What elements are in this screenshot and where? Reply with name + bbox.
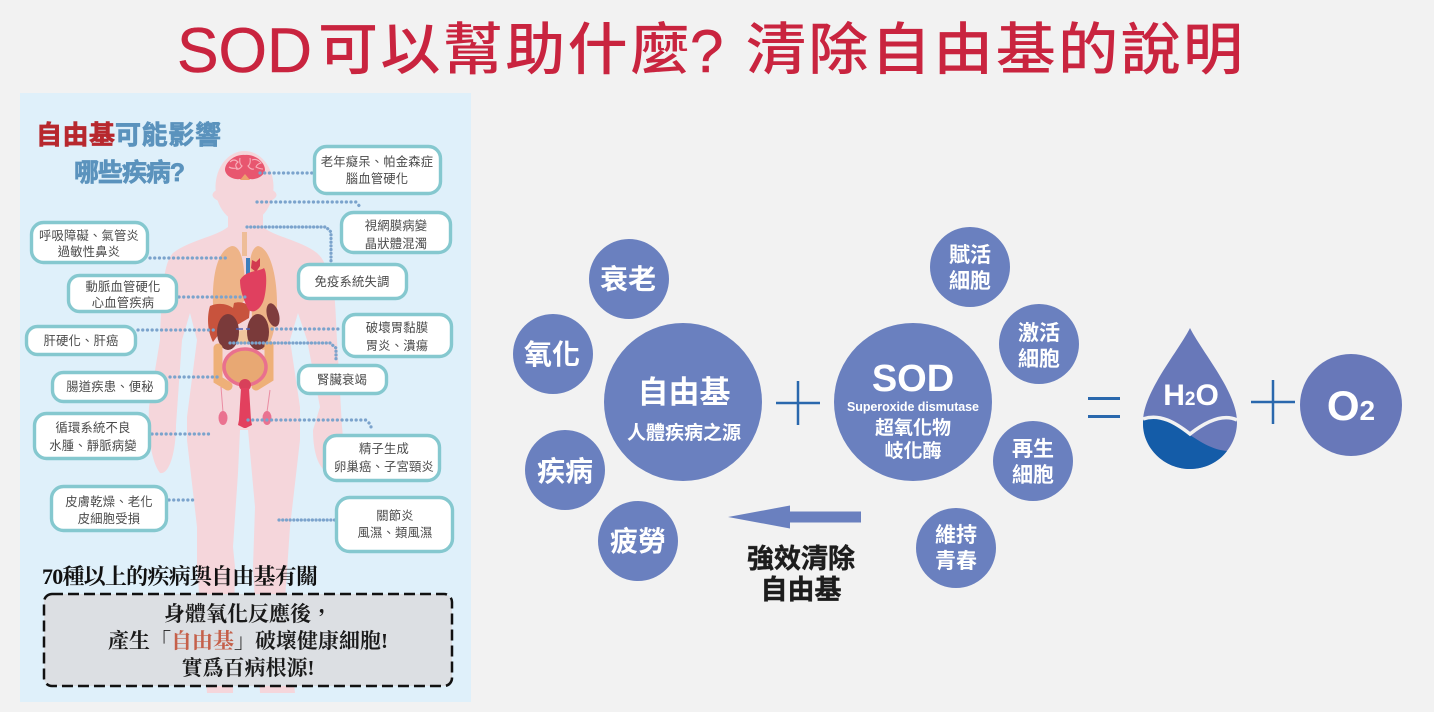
- callout: arteries: 心血管疾病: [92, 295, 154, 310]
- circle: SOD: Superoxide dismutase: [847, 400, 979, 414]
- dotted connector lines: [138, 173, 371, 520]
- panel heading: 可能影響: [115, 120, 221, 150]
- title: [177, 16, 1243, 86]
- callout: liver: 肝硬化、肝癌: [44, 333, 118, 348]
- circle: disease: [525, 430, 605, 510]
- circle: free radicals: 人體疾病之源: [627, 421, 741, 444]
- circle: activate cells: 激活: [1018, 322, 1060, 345]
- callout: respiratory: 呼吸障礙、氣管炎: [39, 228, 139, 243]
- callout: skin: 皮膚乾燥、老化: [65, 494, 153, 509]
- circle: SOD: SOD: [872, 358, 954, 400]
- diagram: free radical cluster: [513, 239, 762, 581]
- icon: brain: [225, 155, 265, 180]
- circle: free radicals: 自由基: [638, 375, 730, 410]
- equals sign: [1088, 398, 1120, 416]
- statement: 70 diseases: 70種以上的疾病與自由基有關: [42, 564, 318, 589]
- callout: dementia: 腦血管硬化: [346, 171, 408, 186]
- circle: oxidation: [513, 314, 593, 394]
- callout: immune: [298, 264, 406, 298]
- callout: stomach: 胃炎、潰瘍: [366, 338, 428, 353]
- circle: SOD: 岐化酶: [884, 440, 942, 462]
- bladder: [224, 349, 266, 385]
- icon: water drop H2O: H2O: [1163, 379, 1219, 412]
- circle: fatigue: [598, 501, 678, 581]
- circle: aging: [589, 239, 669, 319]
- arrow label: 強效清除: [747, 543, 855, 574]
- callout: intestine: 腸道疾患、便秘: [66, 379, 154, 394]
- callout: reproductive: 卵巢癌、子宮頸炎: [334, 459, 434, 474]
- circle: maintain youth: [916, 508, 996, 588]
- dashed summary box: 身體氧化反應後，: [164, 602, 332, 626]
- panel heading: [36, 120, 221, 187]
- callout: stomach: 破壞胃黏膜: [366, 320, 428, 335]
- circle: regenerate cells: [993, 421, 1073, 501]
- callout: respiratory: 過敏性鼻炎: [58, 244, 120, 259]
- circle: free radicals: [604, 323, 762, 481]
- callout: retina: 晶狀體混濁: [365, 236, 427, 251]
- diagram: SOD cluster: [834, 227, 1079, 588]
- arrow label: [747, 543, 855, 605]
- circle: activate cells: 細胞: [1018, 348, 1060, 371]
- panel heading: 自由基: [36, 120, 115, 150]
- circle: invigorate cells: 細胞: [949, 270, 991, 293]
- callout: intestine: [52, 372, 166, 402]
- circle: SOD: 超氧化物: [875, 417, 951, 439]
- dashed summary box: [44, 594, 452, 686]
- callout: circulation: [34, 414, 150, 458]
- callout: dementia: 老年癡呆、帕金森症: [321, 154, 433, 169]
- circle: aging: 衰老: [600, 264, 656, 295]
- callout: respiratory: [32, 222, 148, 262]
- callout: joints: 關節炎: [376, 508, 414, 523]
- reproductive organs: [239, 379, 251, 391]
- callout: liver: [26, 326, 136, 354]
- callout: joints: 風濕、類風濕: [358, 526, 432, 540]
- panel: diseases linked to free radicals: [20, 93, 471, 702]
- callout: stomach: [344, 314, 452, 356]
- icon: water drop H2O: [1143, 328, 1237, 469]
- circle: oxidation: 氧化: [524, 339, 580, 370]
- intestine: [218, 345, 269, 386]
- circle: disease: 疾病: [537, 456, 593, 487]
- arrow: SOD clears free radicals: [728, 506, 861, 528]
- circle: maintain youth: 維持: [935, 524, 977, 547]
- callout: joints: [336, 498, 452, 552]
- windpipe: [242, 232, 247, 256]
- circle: regenerate cells: 再生: [1012, 438, 1054, 461]
- circle: SOD: [834, 323, 992, 481]
- circle: maintain youth: 青春: [935, 550, 977, 573]
- panel heading: 哪些疾病?: [74, 159, 185, 187]
- callout: retina: [342, 212, 450, 252]
- organs illustration: [208, 232, 282, 428]
- panel background: [20, 93, 471, 702]
- circle: activate cells: [999, 304, 1079, 384]
- heart: [240, 258, 266, 311]
- title: 可以幫助什麼: [318, 19, 690, 82]
- dashed summary box: 實爲百病根源!: [182, 656, 314, 680]
- circle: invigorate cells: 賦活: [949, 244, 991, 267]
- callout: immune: 免疫系統失調: [315, 274, 389, 289]
- callout: arteries: [68, 276, 176, 312]
- plus sign: [1251, 380, 1295, 424]
- callout: skin: 皮細胞受損: [78, 511, 140, 526]
- callout: skin: [52, 486, 166, 530]
- dashed summary box: 產生「自由基」破壞健康細胞!: [108, 629, 388, 653]
- callout: kidney: 腎臟衰竭: [317, 372, 367, 387]
- callout: retina: 視網膜病變: [365, 218, 427, 233]
- circle: oxygen: O2: [1327, 382, 1375, 429]
- callout: dementia: [314, 146, 440, 194]
- title: ?: [690, 18, 723, 85]
- title: SOD: [177, 16, 312, 86]
- circle: oxygen: [1300, 354, 1402, 456]
- callout: kidney: [298, 366, 386, 394]
- arrow label: 自由基: [760, 575, 842, 605]
- circle: fatigue: 疲勞: [610, 526, 666, 557]
- renal vessels: [236, 328, 250, 330]
- circle: invigorate cells: [930, 227, 1010, 307]
- callout: reproductive: [324, 436, 440, 480]
- lungs: [213, 246, 245, 309]
- liver: [208, 302, 250, 342]
- title: 清除自由基的說明: [746, 19, 1243, 82]
- callout: reproductive: 精子生成: [359, 442, 409, 456]
- spleen: [264, 302, 282, 328]
- callout: arteries: 動脈血管硬化: [86, 279, 160, 294]
- callout: circulation: 水腫、靜脈病變: [49, 438, 137, 453]
- callout: circulation: 循環系統不良: [56, 420, 130, 435]
- pancreas: [232, 330, 258, 344]
- plus sign: [776, 381, 820, 425]
- kidneys: [217, 314, 239, 350]
- circle: regenerate cells: 細胞: [1012, 464, 1054, 487]
- body silhouette: [149, 151, 343, 693]
